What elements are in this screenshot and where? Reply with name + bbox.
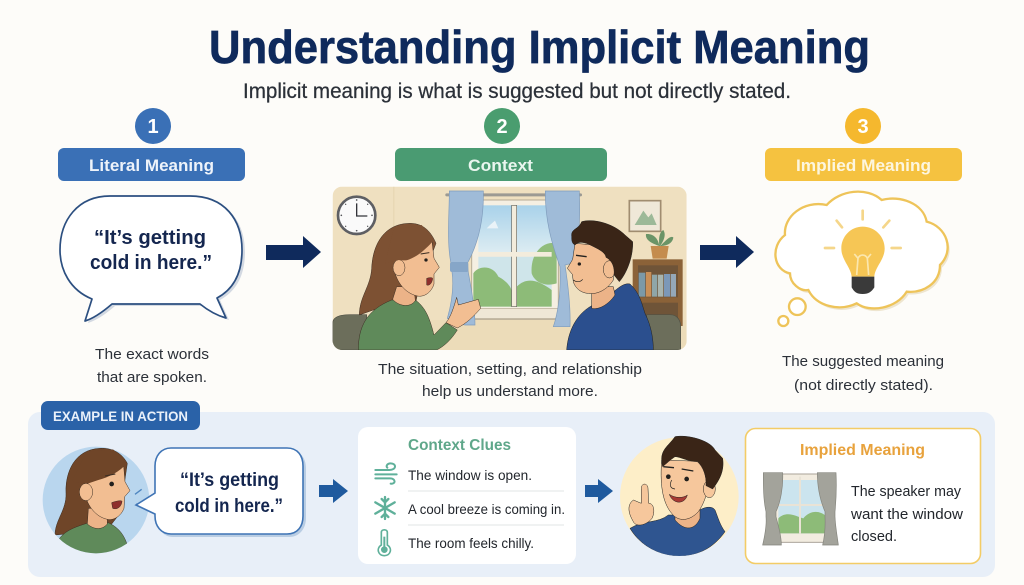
speech bubble xyxy=(60,196,245,323)
heading: context xyxy=(395,148,607,181)
caption: implied meaning: The suggested meaning xyxy=(782,353,944,370)
heading: context clues: Context Clues xyxy=(408,437,511,454)
heading: implied meaning xyxy=(765,148,962,181)
window xyxy=(468,200,562,319)
man xyxy=(567,221,653,350)
framed picture xyxy=(629,201,661,231)
icon: window with curtains xyxy=(763,473,838,545)
icon: wind xyxy=(375,463,397,484)
arrow: quote to clues xyxy=(319,479,348,503)
arrow: context to implied xyxy=(700,236,754,268)
implied meaning text xyxy=(850,483,963,545)
step 1: literal meaning xyxy=(58,108,245,386)
caption: context: help us understand more. xyxy=(422,383,598,400)
implied meaning text: closed. xyxy=(851,528,897,545)
left curtain xyxy=(447,191,483,325)
speech bubble: cold in here.” xyxy=(90,251,212,274)
implied meaning text: want the window xyxy=(850,506,963,523)
heading: context: Context xyxy=(468,157,534,175)
woman xyxy=(358,223,481,350)
subtitle: Implicit meaning is what is suggested but not directly stated. xyxy=(243,79,791,103)
arrow: literal to context xyxy=(266,236,321,268)
thought cloud with light bulb xyxy=(775,192,950,326)
number badge 1: 1 xyxy=(147,116,159,138)
caption: literal meaning xyxy=(95,346,209,386)
caption: context xyxy=(378,361,642,400)
caption: literal meaning: that are spoken. xyxy=(97,369,207,386)
heading: implied meaning result: Implied Meaning xyxy=(800,442,925,459)
heading: literal meaning: Literal Meaning xyxy=(89,157,214,175)
right curtain xyxy=(545,191,580,327)
clue text 1: The window is open. xyxy=(408,467,532,483)
heading: implied meaning: Implied Meaning xyxy=(796,157,931,175)
number badge 2: 2 xyxy=(496,116,508,138)
potted plant xyxy=(646,230,673,259)
title: Understanding Implicit Meaning xyxy=(209,21,870,73)
tag: example in action xyxy=(41,401,200,430)
icon: snowflake xyxy=(375,497,395,519)
tag: example in action: EXAMPLE IN ACTION xyxy=(53,409,188,424)
caption: context: The situation, setting, and relationship xyxy=(378,361,642,378)
icon: thermometer xyxy=(378,530,390,556)
card: context clues xyxy=(358,427,576,564)
number badge 3: 3 xyxy=(857,116,869,138)
speech bubble: quote: cold in here.” xyxy=(175,496,283,517)
step 3: implied meaning xyxy=(765,108,962,394)
step 2: context xyxy=(333,108,687,400)
armchair left xyxy=(333,315,367,350)
illustration: conversation by the window xyxy=(333,187,687,350)
panel: example in action xyxy=(28,401,995,577)
speech bubble: quote: “It’s getting xyxy=(180,470,279,491)
implied meaning text: The speaker may xyxy=(851,483,961,500)
number badge 1 xyxy=(135,108,171,144)
clue text 3: The room feels chilly. xyxy=(408,535,534,551)
caption: implied meaning: (not directly stated). xyxy=(794,377,933,394)
arrow: clues to listener xyxy=(585,479,613,503)
bookshelf xyxy=(633,259,683,326)
speech bubble: “It’s getting xyxy=(94,226,206,249)
armchair right xyxy=(647,315,681,350)
card: implied meaning xyxy=(746,428,980,564)
caption: implied meaning xyxy=(782,353,944,394)
clue text 2: A cool breeze is coming in. xyxy=(408,501,565,517)
caption: literal meaning: The exact words xyxy=(95,346,209,363)
curtain rod xyxy=(445,193,582,196)
wall clock xyxy=(338,197,375,234)
speech bubble: quote xyxy=(136,448,306,537)
heading: literal meaning xyxy=(58,148,245,181)
number badge 2 xyxy=(484,108,520,144)
number badge 3 xyxy=(845,108,881,144)
portrait: woman speaking xyxy=(43,447,149,557)
portrait: man with idea xyxy=(620,436,739,556)
